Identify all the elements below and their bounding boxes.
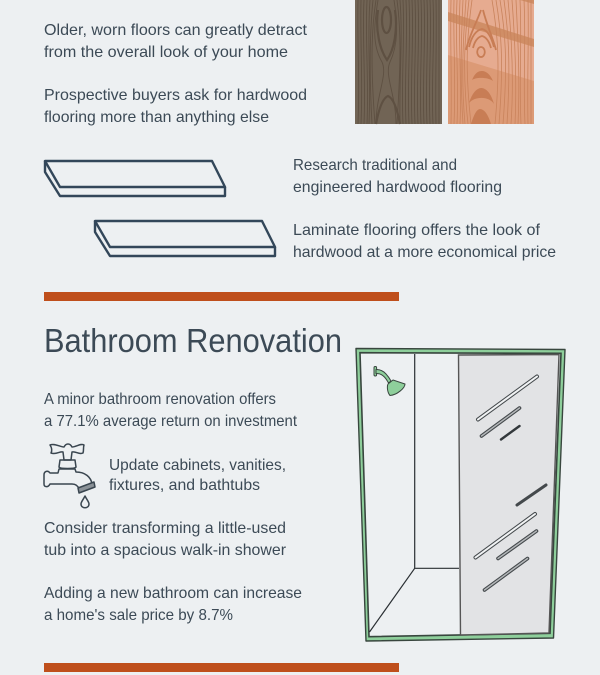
icon: faucet bbox=[44, 444, 95, 508]
text block: update cabinets bbox=[109, 457, 286, 494]
text block: walk-in shower: Consider transforming a little-used bbox=[44, 520, 286, 537]
text block: minor renovation return bbox=[44, 391, 298, 430]
text block: new bathroom price bbox=[44, 585, 302, 624]
text block: walk-in shower: tub into a spacious walk-in shower bbox=[44, 542, 287, 559]
heading: Bathroom Renovation: Bathroom Renovation bbox=[44, 322, 342, 359]
image: dark wood plank bbox=[355, 0, 442, 124]
shower interior bbox=[360, 353, 561, 637]
shower frame bbox=[356, 348, 565, 641]
text block: research flooring bbox=[293, 157, 502, 196]
text block: worn floors: from the overall look of your home bbox=[44, 44, 288, 61]
text block: prospective buyers: Prospective buyers ask for hardwood bbox=[44, 87, 307, 104]
divider bar: top bbox=[44, 292, 399, 301]
text block: worn floors: Older, worn floors can greatly detract bbox=[44, 22, 308, 39]
glass door bbox=[458, 354, 559, 635]
icon: upper wood plank outline bbox=[45, 161, 225, 196]
text block: worn floors bbox=[44, 22, 308, 61]
icon: shower head bbox=[374, 366, 405, 396]
text block: laminate flooring: Laminate flooring offers the look of bbox=[293, 222, 541, 239]
text block: prospective buyers: flooring more than anything else bbox=[44, 109, 269, 126]
text block: research flooring: engineered hardwood flooring bbox=[293, 179, 502, 196]
back wall lines bbox=[370, 354, 459, 632]
text block: minor renovation return: A minor bathroom renovation offers bbox=[44, 391, 276, 408]
text block: walk-in shower bbox=[44, 520, 287, 559]
text block: research flooring: Research traditional and bbox=[293, 157, 457, 174]
text block: laminate flooring bbox=[293, 222, 556, 261]
text block: prospective buyers bbox=[44, 87, 307, 126]
divider bar: bottom bbox=[44, 663, 399, 672]
illustration: walk-in shower bbox=[356, 348, 565, 641]
text block: new bathroom price: Adding a new bathroom can increase bbox=[44, 585, 302, 602]
text block: update cabinets: fixtures, and bathtubs bbox=[109, 477, 260, 494]
text block: new bathroom price: a home's sale price by 8.7% bbox=[44, 607, 233, 624]
text block: update cabinets: Update cabinets, vanities, bbox=[109, 457, 286, 474]
glass reflections bbox=[476, 376, 546, 590]
text block: minor renovation return: a 77.1% average return on investment bbox=[44, 413, 298, 430]
text block: laminate flooring: hardwood at a more economical price bbox=[293, 244, 556, 261]
image: light wood plank bbox=[448, 0, 534, 124]
icon: lower wood plank outline bbox=[95, 221, 275, 256]
